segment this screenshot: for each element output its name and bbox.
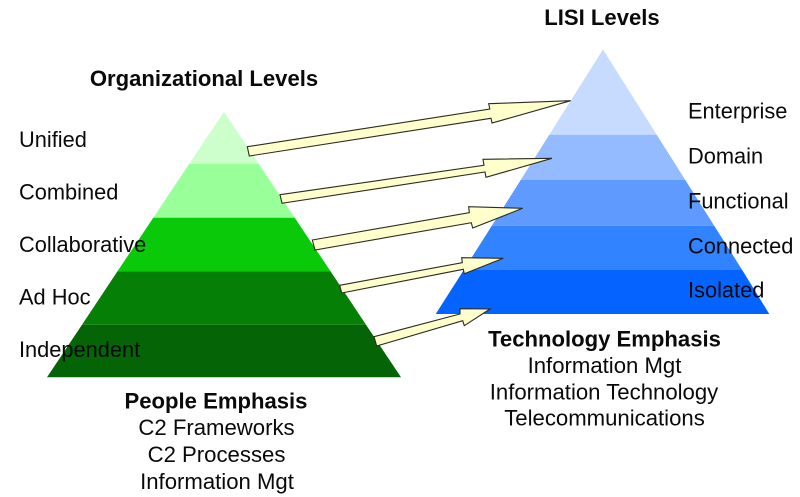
pyramid tier: Unified — [189, 112, 259, 164]
label: Independent: Independent — [19, 337, 140, 362]
item: C2 Frameworks: C2 Frameworks — [138, 415, 295, 440]
label: Enterprise: Enterprise — [688, 98, 787, 124]
pyramid tier: Collaborative — [118, 218, 330, 271]
text block: LISI level labels — [688, 98, 793, 302]
label: Functional: Functional — [688, 188, 789, 214]
label: Isolated: Isolated — [688, 278, 764, 302]
panel: organizational levels pyramid — [47, 112, 401, 377]
item: Information Technology: Information Technology — [490, 380, 719, 404]
item: Information Mgt: Information Mgt — [140, 469, 294, 494]
item: Telecommunications: Telecommunications — [504, 406, 705, 430]
arrow: Combined to Domain — [280, 158, 552, 203]
pyramid tier: Isolated — [436, 270, 769, 314]
panel: LISI levels pyramid — [436, 50, 769, 314]
heading: Organizational Levels: Organizational Levels — [90, 66, 318, 91]
pyramid tier: Domain — [521, 135, 685, 180]
pyramid tier: Independent — [47, 325, 401, 377]
arrow: Collaborative to Functional — [312, 207, 523, 250]
pyramid tier: Combined — [153, 164, 295, 218]
pyramid tier: Ad Hoc — [82, 271, 366, 325]
heading: Technology Emphasis: Technology Emphasis — [488, 326, 721, 352]
arrow: Unified to Enterprise — [247, 101, 571, 156]
label: Domain: Domain — [688, 144, 763, 168]
label: Collaborative: Collaborative — [19, 232, 146, 257]
label: Unified: Unified — [19, 127, 87, 152]
text block: People Emphasis — [125, 388, 307, 494]
pyramid tier: Functional — [492, 180, 714, 226]
heading: People Emphasis: People Emphasis — [125, 388, 307, 414]
text block: Technology Emphasis — [488, 326, 721, 430]
arrow: Ad Hoc to Connected — [340, 258, 503, 293]
item: Information Mgt: Information Mgt — [528, 353, 681, 378]
pyramid tier: Enterprise — [549, 50, 657, 135]
pyramid tier: Connected — [464, 226, 742, 270]
item: C2 Processes: C2 Processes — [148, 442, 285, 467]
arrow: Independent to Isolated — [374, 309, 490, 346]
label: Combined: Combined — [19, 180, 118, 204]
heading: LISI Levels: LISI Levels — [544, 5, 660, 30]
text block: organizational level labels — [19, 127, 146, 362]
label: Ad Hoc: Ad Hoc — [19, 284, 91, 310]
label: Connected: Connected — [688, 234, 793, 258]
